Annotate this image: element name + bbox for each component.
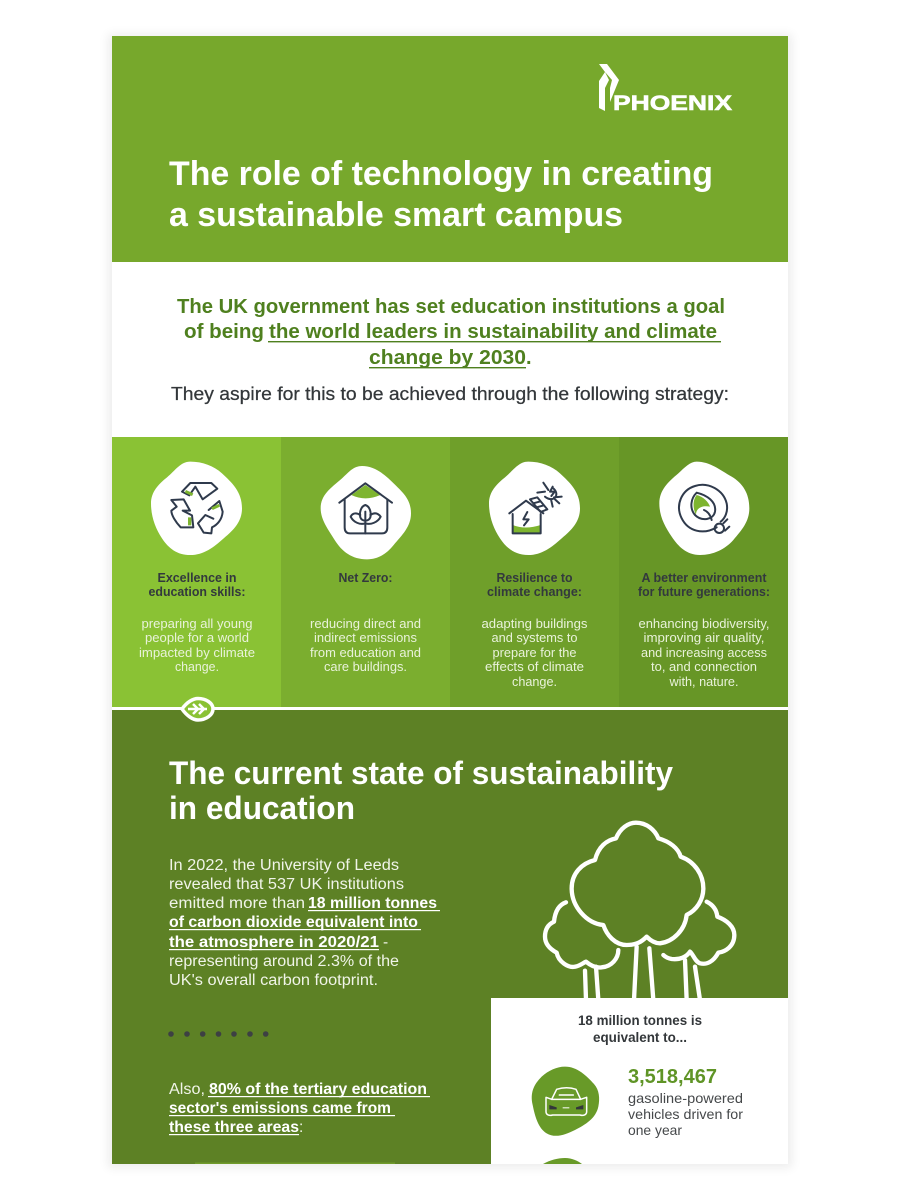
icon: next equivalent blob [543, 1158, 582, 1164]
description: prepare for the [492, 646, 577, 660]
paragraph: emissions: In 2022, the University of Leeds [169, 857, 399, 874]
paragraph: three areas: Also, [169, 1081, 205, 1098]
panel: equivalents [491, 998, 788, 1164]
icon: leaf divider badge [182, 698, 213, 720]
title: a sustainable smart campus [169, 196, 623, 234]
paragraph: emissions: revealed that 537 UK institutions [169, 876, 404, 893]
description: preparing all young [142, 617, 253, 631]
description: people for a world [145, 631, 249, 645]
paragraph: emissions: - [383, 934, 388, 951]
heading: education skills: [148, 585, 246, 599]
panel: net zero [281, 437, 450, 708]
heading [169, 755, 673, 826]
stat: vehicles: vehicles driven for [628, 1106, 743, 1122]
heading: Resilience to [496, 571, 573, 585]
paragraph: emissions: emitted more than [169, 895, 305, 912]
icon: leaf and plug [659, 462, 749, 555]
description: and systems to [492, 631, 578, 645]
intro text block: of being [184, 321, 264, 343]
panel: excellence in education skills [112, 437, 281, 708]
dotted separator [168, 1031, 269, 1037]
paragraph: three areas: 80% of the tertiary education [209, 1081, 427, 1098]
paragraph: emissions: of carbon dioxide equivalent into [169, 914, 418, 931]
stat: vehicles [628, 1066, 743, 1138]
icon: resilient house [489, 462, 580, 555]
heading: climate change: [487, 585, 582, 599]
paragraph: emissions: representing around 2.3% of the [169, 953, 399, 970]
description: impacted by climate [139, 646, 255, 660]
paragraph: three areas: : [299, 1119, 303, 1136]
stat: vehicles: 3,518,467 [628, 1066, 717, 1088]
description [482, 617, 588, 689]
logo: Phoenix [599, 64, 732, 115]
heading: equivalent to... [593, 1030, 687, 1045]
heading: in education [169, 790, 355, 826]
title [169, 155, 713, 234]
paragraph: emissions: 18 million tonnes [308, 895, 437, 912]
paragraph: emissions: the atmosphere in 2020/21 [169, 934, 379, 951]
description: care buildings. [324, 660, 407, 674]
icon: recycling [151, 462, 242, 555]
description [310, 617, 421, 674]
description: adapting buildings [482, 617, 588, 631]
icon: net zero house [321, 466, 411, 559]
logo: Phoenix: PHOENIX [613, 92, 732, 115]
panel: resilience to climate change [450, 437, 619, 708]
panel: a better environment [619, 437, 788, 708]
intro text block: the world leaders in sustainability and climate [269, 321, 717, 343]
description: change. [512, 675, 557, 689]
description: change. [175, 660, 219, 674]
heading [487, 571, 582, 599]
heading [578, 1013, 702, 1045]
paragraph: three areas [169, 1081, 430, 1136]
icon: car [532, 1067, 599, 1136]
intro text block: . [526, 347, 532, 369]
paragraph: emissions [169, 857, 440, 989]
paragraph: emissions: UK's overall carbon footprint. [169, 972, 378, 989]
heading [638, 571, 770, 599]
intro text block: The UK government has set education institutions a goal [177, 296, 725, 318]
description: and increasing access [641, 646, 767, 660]
panel: current state [112, 698, 788, 1164]
heading: The current state of sustainability [169, 755, 673, 791]
intro text block [177, 296, 725, 369]
panel: header [112, 36, 788, 262]
strategy sentence: They aspire for this to be achieved through the following strategy: [171, 383, 729, 404]
heading: 18 million tonnes is [578, 1013, 702, 1028]
stat: vehicles: one year [628, 1122, 682, 1138]
paragraph: three areas: these three areas [169, 1119, 299, 1136]
description: with, nature. [668, 675, 738, 689]
description: improving air quality, [644, 631, 764, 645]
intro text block: change by 2030 [369, 347, 526, 369]
illustration: trees [545, 823, 734, 1000]
heading: Net Zero: [338, 571, 392, 585]
description: from education and [310, 646, 421, 660]
description [139, 617, 255, 674]
paragraph: three areas: sector's emissions came from [169, 1100, 391, 1117]
heading: for future generations: [638, 585, 770, 599]
heading [148, 571, 246, 599]
description: enhancing biodiversity, [638, 617, 770, 631]
description: effects of climate [485, 660, 584, 674]
description: to, and connection [651, 660, 757, 674]
description: reducing direct and [310, 617, 421, 631]
stat: vehicles: gasoline-powered [628, 1090, 743, 1106]
heading: Excellence in [158, 571, 236, 585]
description [638, 617, 770, 689]
description: indirect emissions [314, 631, 417, 645]
title: The role of technology in creating [169, 155, 713, 193]
heading: A better environment [642, 571, 767, 585]
